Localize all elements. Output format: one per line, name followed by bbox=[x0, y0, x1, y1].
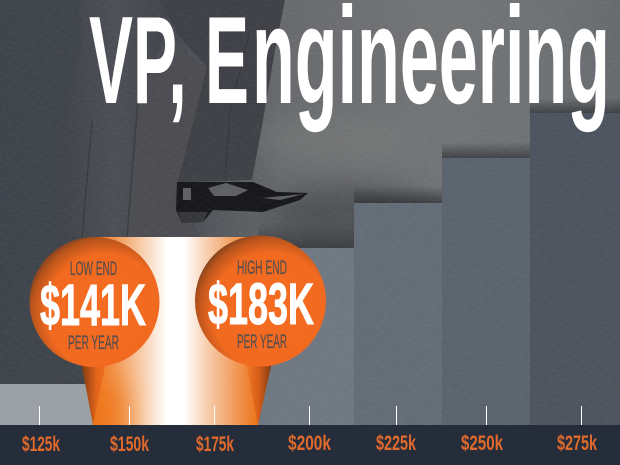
title bbox=[89, 0, 610, 133]
pin circle bbox=[195, 236, 326, 366]
high end value: $183K bbox=[208, 272, 314, 337]
back leg bbox=[58, 0, 172, 237]
axis labels bbox=[22, 432, 597, 456]
high end label: HIGH END bbox=[237, 258, 287, 279]
axis labels: $275k bbox=[557, 432, 597, 455]
step shadows bbox=[258, 98, 620, 248]
front leg bbox=[160, 0, 285, 182]
bar: $275k step bbox=[530, 113, 620, 425]
axis labels: $175k bbox=[196, 433, 234, 456]
bar: $225k step bbox=[354, 203, 442, 425]
low end label: LOW END bbox=[70, 259, 117, 280]
axis labels: $125k bbox=[22, 433, 60, 456]
axis labels: $250k bbox=[461, 432, 503, 455]
bar: $250k step bbox=[442, 158, 530, 425]
x axis strip bbox=[0, 425, 620, 465]
salary range band bbox=[93, 237, 258, 425]
bar: $125k step bbox=[0, 384, 100, 425]
pin tail bbox=[246, 362, 272, 425]
axis labels: $200k bbox=[288, 432, 331, 455]
per year: PER YEAR bbox=[237, 332, 287, 353]
low end value: $141K bbox=[40, 273, 146, 338]
pin circle bbox=[30, 237, 160, 367]
bar: $200k step bbox=[250, 248, 354, 425]
deeper orange glow at band base bbox=[85, 385, 125, 445]
trouser creases bbox=[82, 30, 250, 237]
high end marker bbox=[195, 236, 326, 425]
axis labels: $225k bbox=[376, 432, 416, 455]
axis labels: $150k bbox=[110, 433, 149, 456]
icon: shoe bbox=[176, 182, 308, 223]
pin tail bbox=[81, 362, 106, 425]
axis ticks bbox=[39, 406, 582, 425]
gap between legs bbox=[127, 40, 207, 237]
businessman legs bbox=[58, 0, 285, 237]
per year: PER YEAR bbox=[68, 333, 119, 354]
low end marker bbox=[30, 237, 160, 425]
background haze bbox=[250, 118, 435, 243]
